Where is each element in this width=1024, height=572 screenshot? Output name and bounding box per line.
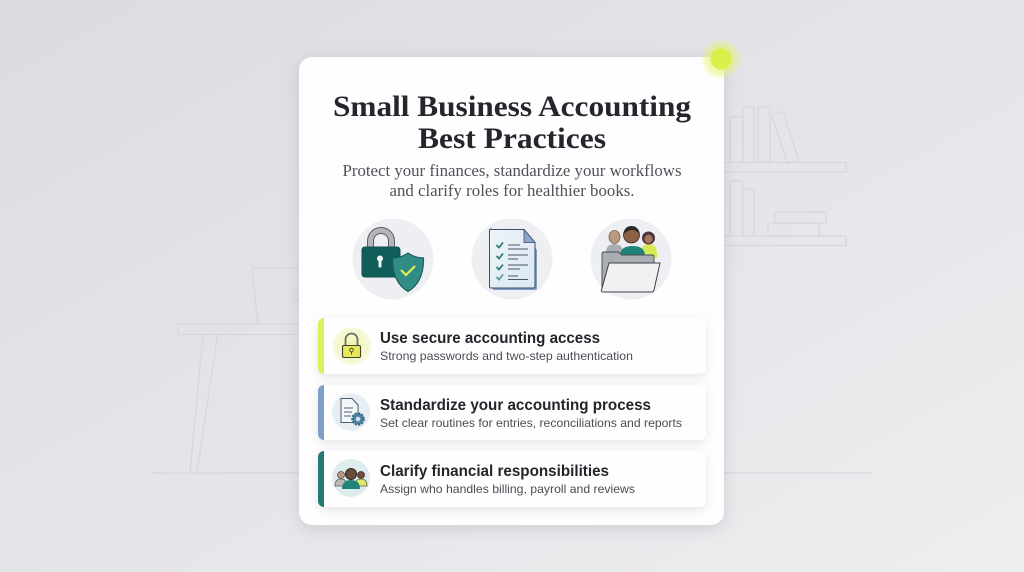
row text bbox=[380, 330, 633, 363]
row text bbox=[380, 397, 682, 430]
row text: Strong passwords and two-step authentication bbox=[380, 349, 633, 363]
icon: document with gear bbox=[332, 393, 370, 431]
icon: team and folder bbox=[590, 218, 672, 300]
row text: Standardize your accounting process bbox=[380, 397, 651, 414]
main card bbox=[299, 57, 724, 525]
row: clarify financial responsibilities bbox=[318, 451, 706, 507]
row text: Set clear routines for entries, reconciliations and reports bbox=[380, 416, 682, 430]
background illustration: desk with laptop bbox=[178, 268, 305, 472]
subtitle bbox=[342, 161, 682, 200]
background illustration: floor line bbox=[152, 472, 872, 474]
icon: small team bbox=[332, 459, 370, 497]
background illustration: bookshelves bbox=[700, 107, 846, 246]
title bbox=[333, 90, 691, 155]
row: standardize your accounting process bbox=[318, 385, 706, 440]
row text: Use secure accounting access bbox=[380, 330, 600, 347]
row text: Clarify financial responsibilities bbox=[380, 463, 609, 480]
row text: Assign who handles billing, payroll and reviews bbox=[380, 482, 635, 496]
icon: small padlock bbox=[333, 327, 371, 365]
subtitle: and clarify roles for healthier books. bbox=[390, 181, 634, 200]
title: Small Business Accounting bbox=[333, 90, 691, 123]
icon: checklist document bbox=[472, 218, 552, 300]
title: Best Practices bbox=[418, 122, 606, 155]
subtitle: Protect your finances, standardize your workflows bbox=[342, 161, 682, 180]
row text bbox=[380, 463, 635, 496]
accent glow dot bbox=[700, 38, 742, 80]
icon: lock and shield bbox=[352, 218, 434, 300]
row: use secure accounting access bbox=[318, 318, 706, 374]
